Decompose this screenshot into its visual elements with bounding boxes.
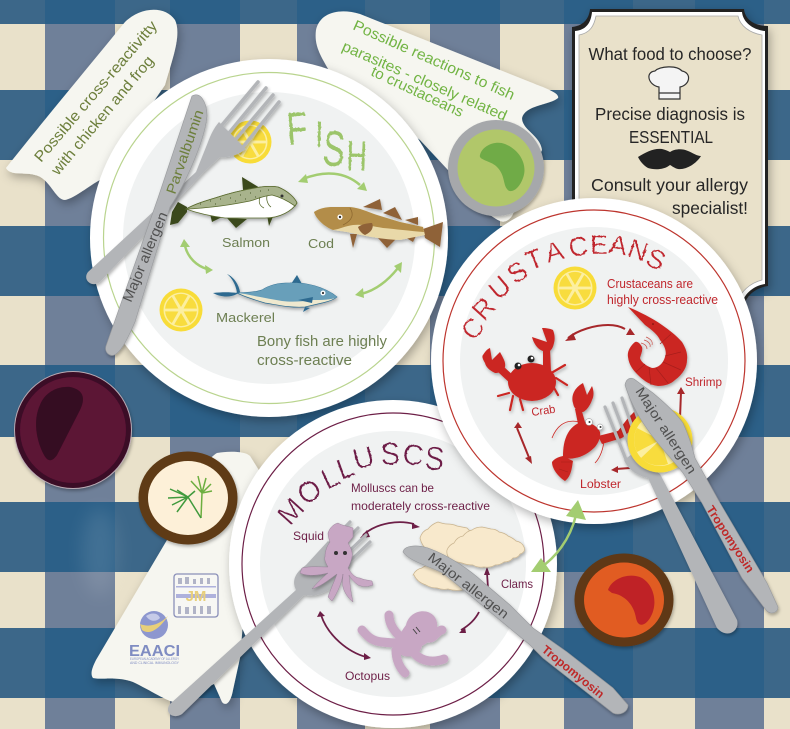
- title: FISH: [285, 104, 368, 180]
- title: MOLLUSCS: O: [292, 473, 328, 512]
- title: FISH: F: [285, 104, 309, 155]
- icon: salmon: [170, 177, 297, 228]
- title: CRUSTACEANS: E: [590, 230, 608, 260]
- text: consult your allergy specialist: Consult your allergy: [591, 175, 748, 195]
- title: CRUSTACEANS: S: [502, 255, 533, 290]
- text: crustaceans note: [607, 277, 718, 307]
- text: bony fish note: cross-reactive: [257, 353, 352, 369]
- napkin: reactions to fish parasites: Possible reactions to fish: [350, 17, 517, 104]
- napkin: cross-reactivity with chicken and frog: Possible cross-reactivitty: [31, 17, 161, 166]
- panel: molluscs plate: [168, 400, 628, 728]
- title: CRUSTACEANS: U: [483, 270, 517, 306]
- bowl: red sauce: [574, 554, 674, 646]
- title: MOLLUSCS: U: [350, 440, 378, 477]
- bowl: green sauce: [448, 120, 544, 216]
- text: bony fish note: Bony fish are highly: [257, 334, 388, 350]
- text: what food to choose: What food to choose?: [588, 44, 752, 64]
- bowl: cream dip with dill: [138, 452, 238, 544]
- label: Crab: Crab: [531, 404, 556, 419]
- logo: JM journal: [174, 574, 218, 617]
- title: CRUSTACEANS: N: [624, 233, 652, 268]
- title: MOLLUSCS: L: [316, 461, 345, 496]
- text: molluscs note: moderately cross-reactive: [351, 499, 490, 513]
- title: FISH: H: [346, 131, 368, 180]
- logo: EAACI: EUROPEAN ACADEMY OF ALLERGY: [130, 657, 180, 661]
- arrows: crustaceans cycle: [514, 325, 685, 473]
- arrows: molluscs cycle: [317, 522, 490, 660]
- icon: dill sprig: [168, 476, 212, 518]
- knife: tropomyosin molluscs: Tropomyosin: [539, 642, 607, 701]
- text: consult your allergy specialist: [591, 175, 748, 218]
- title: MOLLUSCS: L: [332, 451, 359, 487]
- knife: tropomyosin crustaceans: Tropomyosin: [703, 503, 757, 575]
- label: Salmon: Salmon: [222, 235, 270, 250]
- icon: lemon slice behind fork: [228, 120, 272, 164]
- logo: EAACI: EAACI: [129, 643, 180, 660]
- icon: lobster: [552, 383, 645, 481]
- label: Clams: Clams: [501, 577, 533, 591]
- text: ESSENTIAL: ESSENTIAL: [629, 127, 713, 147]
- label: Lobster: Lobster: [580, 479, 621, 491]
- title: FISH: S: [321, 120, 347, 177]
- icon: lemon slice: [554, 266, 596, 310]
- icon: octopus: [362, 611, 444, 673]
- title: CRUSTACEANS: A: [542, 235, 567, 269]
- title: CRUSTACEANS: R: [466, 291, 502, 326]
- label: Mackerel: Mackerel: [216, 310, 275, 325]
- bowl: wine-coloured sauce: [14, 371, 132, 489]
- icon: cod: [314, 199, 443, 248]
- text: consult your allergy specialist: specialist!: [672, 198, 748, 218]
- napkin: reactions to fish parasites: to crustaceans: [368, 63, 466, 121]
- title: CRUSTACEANS: [455, 229, 670, 346]
- fork: [168, 522, 370, 716]
- arrows: fish cycle: [180, 173, 402, 298]
- icon: squid: [300, 523, 373, 602]
- title: MOLLUSCS: M: [271, 492, 311, 532]
- napkin: cross-reactivity with chicken and frog: [6, 10, 177, 200]
- fork: [605, 395, 737, 633]
- logo: EAACI: AND CLINICAL IMMUNOLOGY: [130, 661, 180, 665]
- napkin: cross-reactivity with chicken and frog: with chicken and frog: [47, 53, 157, 179]
- arrow: molluscs to crustaceans cross-reactivity: [531, 500, 586, 572]
- knife: tropomyosin molluscs: [403, 546, 628, 714]
- icon: chef hat: [649, 67, 689, 99]
- knife: parvalbumin: Major allergen: [119, 209, 171, 304]
- label: Shrimp: Shrimp: [685, 377, 722, 389]
- knife: tropomyosin crustaceans: [625, 378, 778, 613]
- icon: moustache: [638, 149, 701, 169]
- text: precise diagnosis: Precise diagnosis is: [595, 104, 745, 124]
- knife: parvalbumin: Parvalbumin: [163, 108, 206, 196]
- icon: shrimp: [628, 307, 687, 386]
- title: MOLLUSCS: S: [380, 436, 401, 472]
- knife: tropomyosin molluscs: Major allergen: [425, 550, 512, 622]
- icon: lemon under knife: [628, 408, 692, 472]
- panel: crustaceans plate: [431, 198, 778, 633]
- label: Octopus: Octopus: [345, 669, 390, 683]
- panel: fish plate: [86, 59, 448, 417]
- text: crustaceans note: highly cross-reactive: [607, 293, 718, 307]
- fork: [86, 82, 279, 284]
- icon: mackerel: [213, 274, 337, 312]
- title: CRUSTACEANS: S: [642, 242, 670, 277]
- knife: parvalbumin: [106, 95, 207, 355]
- napkin: reactions to fish parasites: [316, 11, 558, 222]
- icon: lemon slice: [160, 288, 202, 332]
- knife: tropomyosin crustaceans: Major allergen: [632, 384, 700, 477]
- text: bony fish note: [257, 334, 388, 369]
- label: Squid: Squid: [293, 529, 324, 543]
- title: CRUSTACEANS: T: [521, 243, 548, 277]
- title: FISH: I: [315, 113, 324, 155]
- panel: advice card: [572, 9, 768, 306]
- icon: crab: [482, 328, 567, 410]
- logo: EAACI: [129, 611, 180, 665]
- title: CRUSTACEANS: C: [455, 312, 491, 346]
- label: Cod: Cod: [308, 236, 334, 251]
- title: MOLLUSCS: S: [423, 439, 446, 478]
- title: MOLLUSCS: C: [402, 439, 425, 472]
- napkin: logos: [92, 452, 260, 704]
- text: crustaceans note: Crustaceans are: [607, 277, 693, 291]
- icon: clams: [413, 522, 524, 590]
- text: molluscs note: [351, 481, 490, 513]
- title: MOLLUSCS: [271, 436, 446, 532]
- napkin: reactions to fish parasites: parasites - closely related: [339, 38, 509, 125]
- text: molluscs note: Molluscs can be: [351, 481, 434, 495]
- title: CRUSTACEANS: C: [567, 231, 590, 263]
- logo: JM journal: JM: [186, 588, 206, 605]
- title: CRUSTACEANS: A: [607, 229, 629, 261]
